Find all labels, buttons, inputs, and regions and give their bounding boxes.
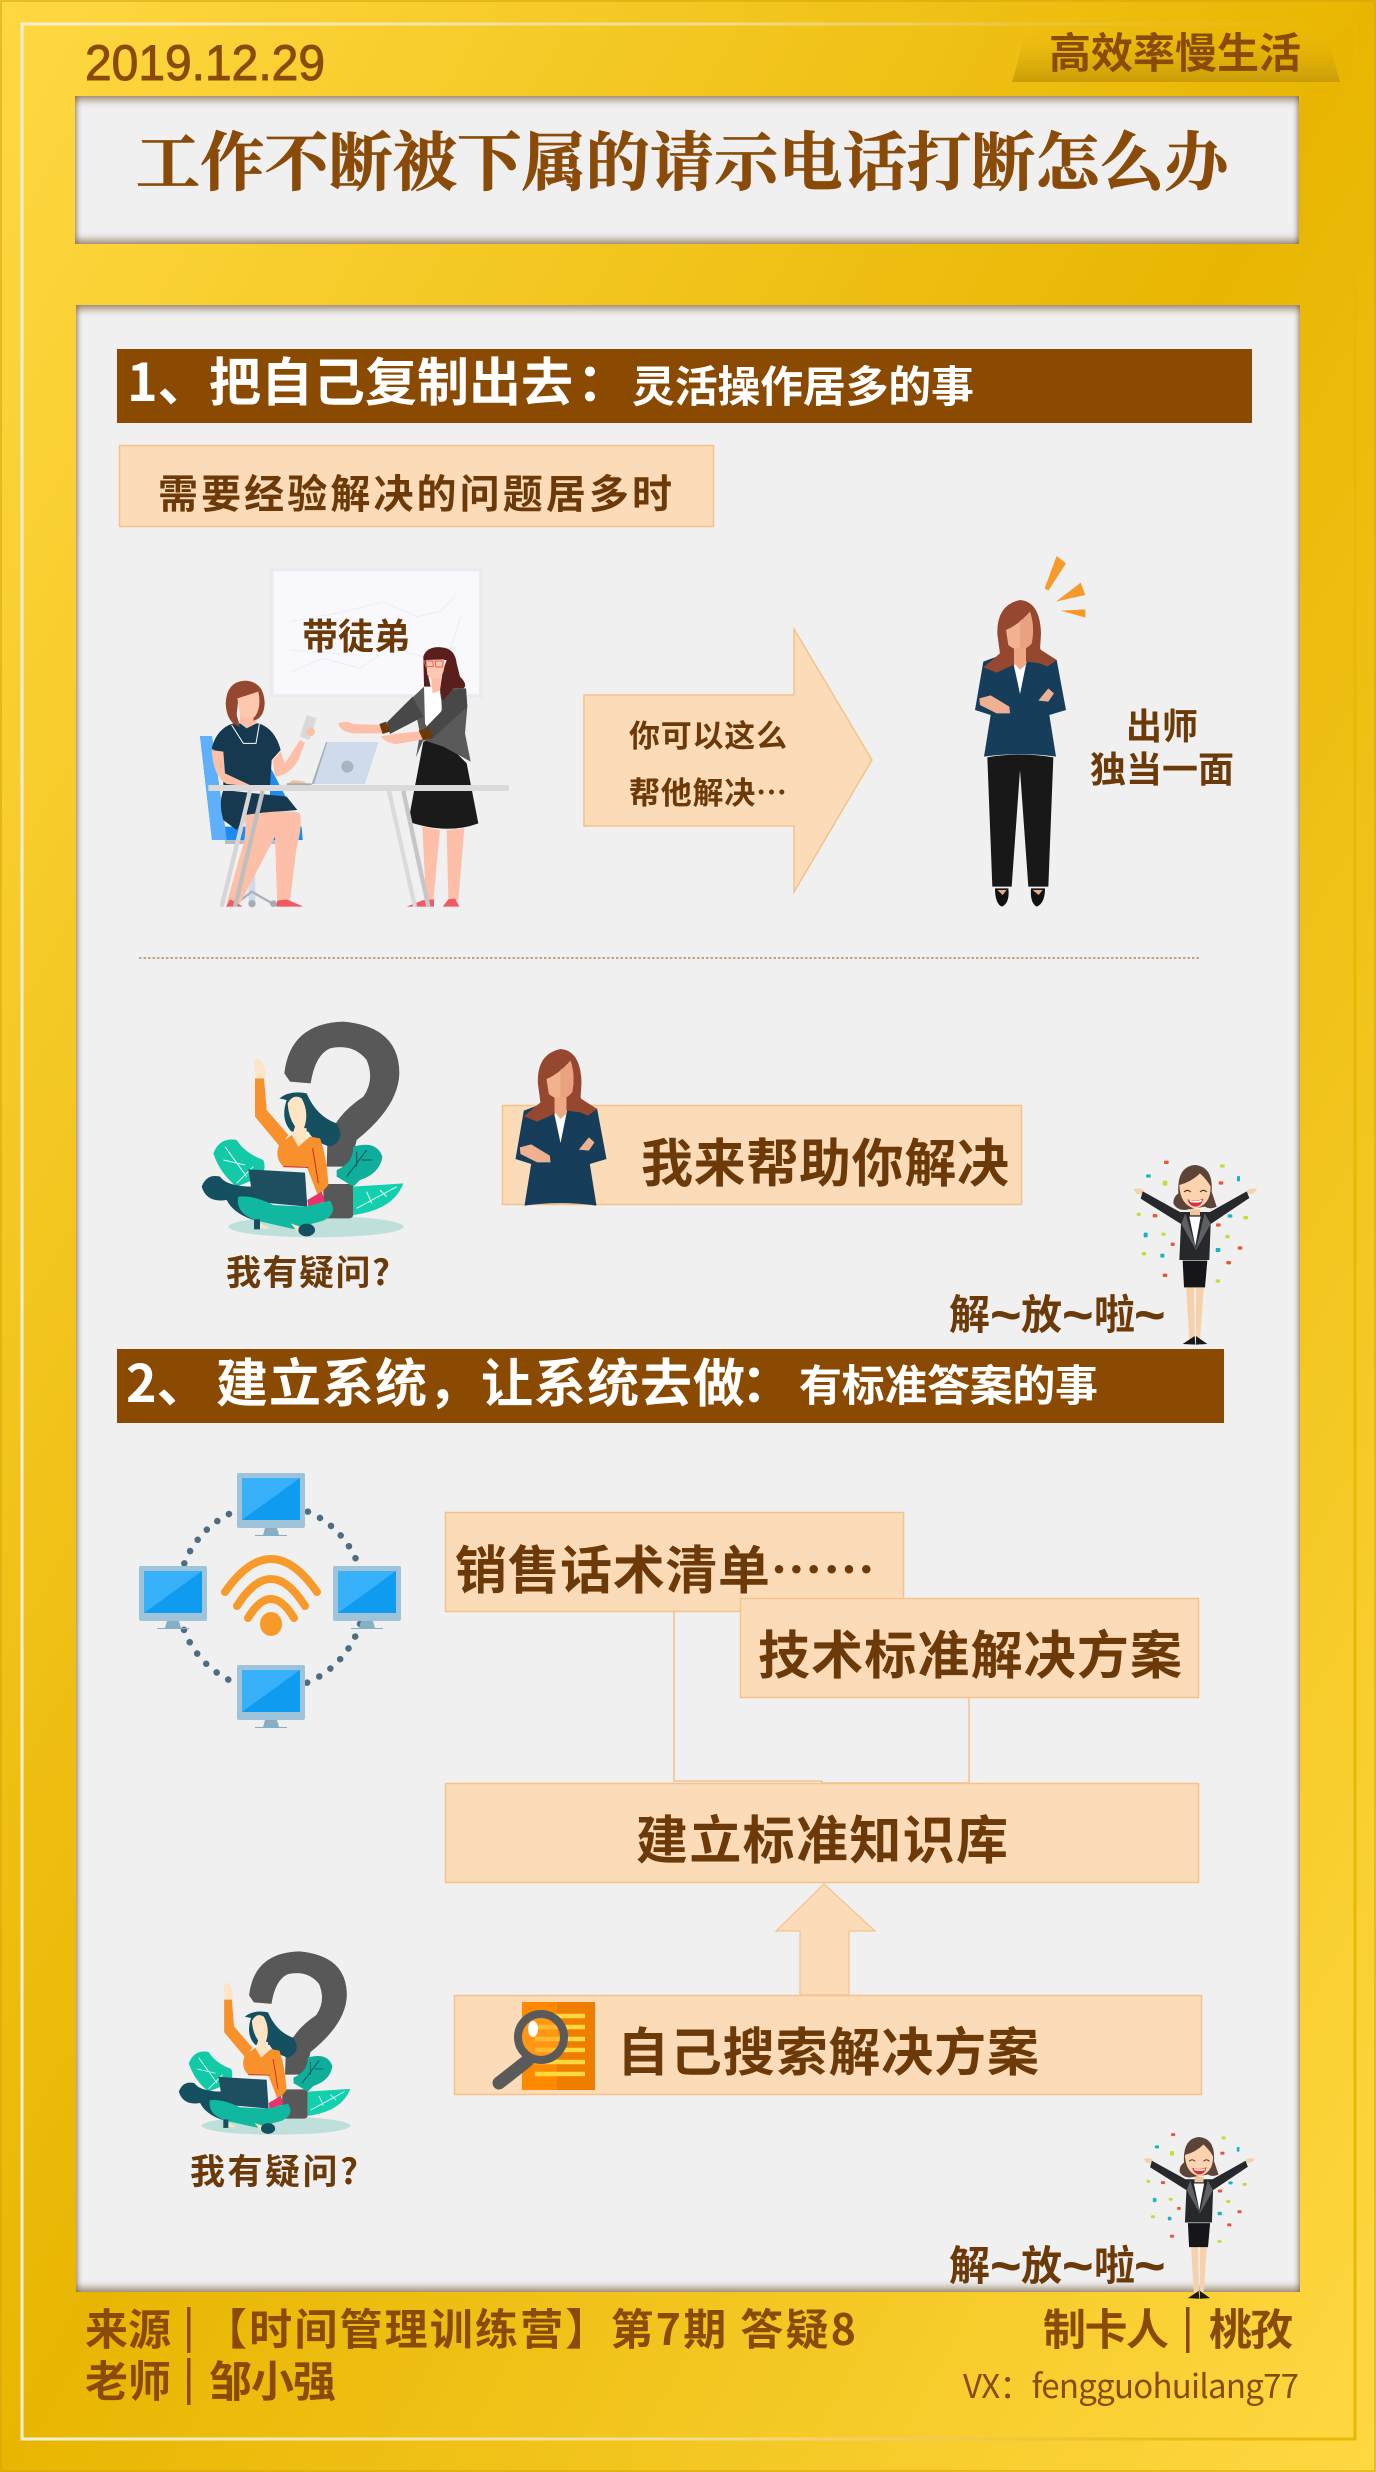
section 2 heading: 2、 xyxy=(126,1342,209,1417)
label: liberated (second): ~ xyxy=(1062,2236,1094,2296)
card: knowledge base xyxy=(446,1784,1198,1882)
illustration: mentoring at desk: 带徒弟 xyxy=(302,608,410,660)
icon: magnifier over document xyxy=(499,2002,595,2090)
label: liberated (second): ~ xyxy=(1134,2236,1166,2296)
card: sales script list: 销售话术清单…… xyxy=(455,1529,875,1604)
footer: card maker: VX：fengguohuilang77 xyxy=(963,2360,1299,2408)
label: liberated: ~ xyxy=(1062,1285,1094,1345)
callout: experience problems xyxy=(120,446,714,526)
footer: source: 老师 xyxy=(85,2348,171,2410)
arrow with advice text: 你可以这么 xyxy=(629,711,787,756)
card: sales script list xyxy=(446,1512,904,1612)
section 1 heading: 灵活操作居多的事 xyxy=(632,353,974,415)
arrow: up xyxy=(776,1884,875,1995)
panel: main content xyxy=(76,305,1300,2292)
series tag: 高效率慢生活 xyxy=(1049,20,1301,81)
footer: source: 【时间管理训练营】第7期 答疑8 xyxy=(204,2296,856,2358)
icon: network of monitors with wifi xyxy=(139,1473,401,1728)
footer: source: 邹小强 xyxy=(209,2348,336,2410)
card: search for solutions: 自己搜索解决方案 xyxy=(617,2011,1039,2086)
footer: source xyxy=(85,2296,856,2410)
arrow with advice text: 帮他解决… xyxy=(629,768,787,813)
callout: experience problems: 需要经验解决的问题居多时 xyxy=(158,462,672,520)
footer: card maker: 桃孜 xyxy=(1209,2296,1293,2358)
illustration: celebrating woman xyxy=(1133,1161,1257,1345)
card: technical solutions: 技术标准解决方案 xyxy=(758,1614,1182,1689)
callout: I will help solve it: 我来帮助你解决 xyxy=(641,1122,1009,1197)
section 2 heading: 有标准答案的事 xyxy=(799,1352,1098,1414)
section 1 heading: 1、 xyxy=(127,341,210,416)
label: liberated xyxy=(949,1281,1166,1345)
section 1 heading: ： xyxy=(577,341,629,416)
illustration: person with question xyxy=(202,1022,404,1237)
date: 2019.12.29 xyxy=(85,35,325,91)
section 2 heading xyxy=(117,1342,1224,1423)
illustration: confident woman xyxy=(975,556,1085,907)
outcome text: 出师 xyxy=(1126,698,1198,750)
section 1 heading: 把自己复制出去 xyxy=(209,341,573,416)
illustration: celebrating woman (second) xyxy=(1144,2133,1255,2299)
label: liberated (second): ~ xyxy=(990,2236,1022,2296)
label: liberated: ~ xyxy=(1134,1285,1166,1345)
footer: source: 来源 xyxy=(85,2296,171,2358)
footer: card maker: 制卡人 xyxy=(1043,2296,1169,2358)
label: liberated: ~ xyxy=(990,1285,1022,1345)
callout: I will help solve it xyxy=(502,1049,1022,1206)
label: liberated (second): 解 xyxy=(949,2232,990,2292)
illustration: mentoring at desk xyxy=(200,569,509,907)
footer: card maker xyxy=(963,2296,1299,2408)
section 2 heading: ： xyxy=(741,1342,793,1417)
label: I have a question: 我有疑问? xyxy=(226,1245,390,1296)
section 1 heading xyxy=(117,341,1252,423)
card: search for solutions xyxy=(454,1996,1202,2094)
title: 工作不断被下属的请示电话打断怎么办 xyxy=(136,112,1233,204)
illustration: person with question (second) xyxy=(179,1951,351,2135)
arrow with advice text xyxy=(584,629,872,892)
outcome text xyxy=(1090,698,1234,793)
label: I have a question (second): 我有疑问? xyxy=(190,2144,358,2195)
outcome text: 独当一面 xyxy=(1090,741,1234,793)
label: liberated (second): 啦 xyxy=(1094,2232,1135,2292)
label: liberated (second) xyxy=(949,2232,1166,2296)
label: liberated: 解 xyxy=(949,1281,990,1341)
panel: title xyxy=(75,96,1299,244)
label: liberated: 放 xyxy=(1021,1281,1062,1341)
label: liberated: 啦 xyxy=(1094,1281,1135,1341)
section 2 heading: 建立系统，让系统去做 xyxy=(216,1342,745,1417)
label: liberated (second): 放 xyxy=(1021,2232,1062,2292)
card: knowledge base: 建立标准知识库 xyxy=(636,1799,1008,1874)
dotted divider xyxy=(139,957,1201,959)
connector lines to knowledge base xyxy=(674,1611,969,1783)
